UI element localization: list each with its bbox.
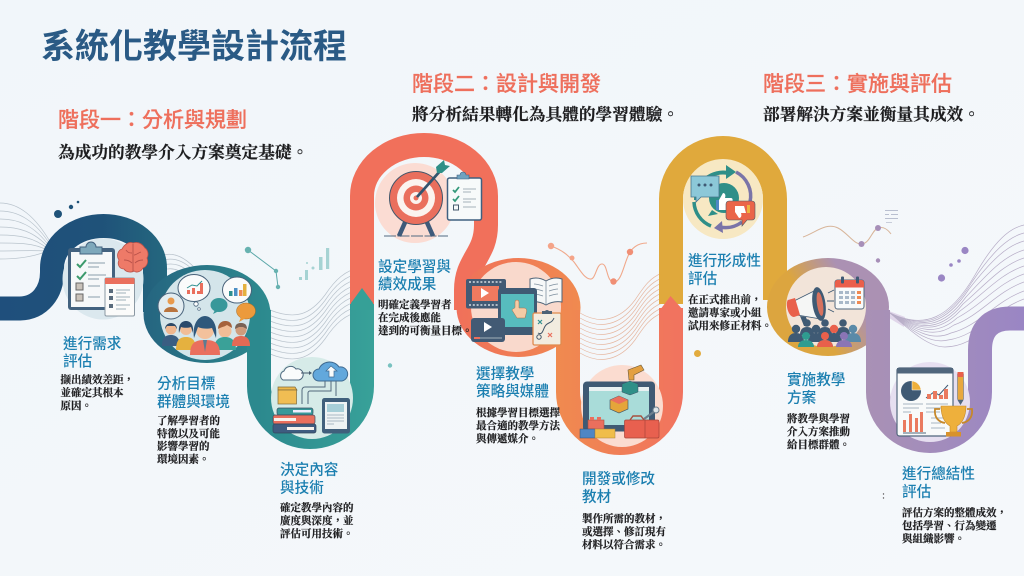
phase three summary: 部署解決方案並衡量其成效。 bbox=[763, 104, 980, 124]
decorative dots and mini charts bbox=[54, 201, 969, 499]
step 5 heading: 選擇教學 bbox=[476, 364, 534, 382]
phase one heading bbox=[58, 109, 308, 162]
step 7 description: 試用來修正材料。 bbox=[688, 319, 772, 332]
step 4 description: 明確定義學習者 bbox=[378, 298, 452, 311]
step 8 heading: 方案 bbox=[787, 388, 816, 406]
phase one title: 階段一：分析與規劃 bbox=[58, 109, 247, 132]
step 2 description: 了解學習者的 bbox=[157, 414, 220, 427]
icon: summative report and trophy bbox=[890, 362, 972, 442]
step 1 description: 撷出績效差距， bbox=[60, 373, 134, 386]
step 8 heading: 實施教學 bbox=[787, 370, 845, 388]
step 2 description: 特徵以及可能 bbox=[157, 427, 220, 440]
step 6 heading: 教材 bbox=[582, 488, 612, 506]
step 6 description: 製作所需的教材， bbox=[582, 512, 666, 525]
icon: needs assessment checklist and brain bbox=[62, 238, 148, 320]
step 3 description: 廣度與深度，並 bbox=[280, 514, 354, 527]
step 9 description: 包括學習、行為變遷 bbox=[902, 519, 997, 532]
step 8 description: 給目標群體。 bbox=[787, 438, 850, 451]
phase two title: 階段二：設計與開發 bbox=[412, 73, 601, 96]
step 5 description: 根據學習目標選擇 bbox=[476, 406, 560, 419]
step 7 text bbox=[688, 252, 772, 332]
step 3 heading: 與技術 bbox=[280, 478, 324, 496]
step 2 description: 環境因素。 bbox=[157, 452, 210, 465]
step 7 heading: 評估 bbox=[688, 270, 718, 288]
step 6 text bbox=[582, 470, 666, 551]
process ribbon bbox=[0, 145, 1024, 443]
step 3 description: 評估可用技術。 bbox=[280, 527, 354, 540]
step 5 description: 最合適的教學方法 bbox=[476, 419, 561, 432]
step 2 description: 影響學習的 bbox=[157, 440, 210, 453]
step 9 heading: 進行總結性 bbox=[902, 466, 975, 482]
step 9 description: 評估方案的整體成效， bbox=[902, 506, 1007, 519]
phase two heading bbox=[412, 73, 679, 124]
step 7 description: 邀請專家或小組 bbox=[688, 306, 762, 319]
step 8 text bbox=[787, 370, 850, 451]
step 1 heading: 進行需求 bbox=[63, 336, 122, 352]
step 9 heading: 評估 bbox=[902, 484, 932, 500]
step 1 description: 並確定其根本 bbox=[60, 386, 124, 399]
step 2 heading: 分析目標 bbox=[157, 376, 215, 392]
icon: implementation megaphone and audience bbox=[786, 267, 866, 347]
step 7 description: 在正式推出前， bbox=[688, 293, 762, 306]
step 6 description: 或選擇、修訂現有 bbox=[582, 525, 666, 538]
step 3 text bbox=[280, 460, 354, 540]
step 3 heading: 決定內容 bbox=[280, 460, 339, 478]
step 4 description: 達到的可衡量目標。 bbox=[378, 324, 472, 337]
step 5 description: 與傳遞媒介。 bbox=[476, 432, 539, 445]
step 4 heading: 設定學習與 bbox=[378, 258, 451, 276]
decorative waves bbox=[0, 203, 1024, 359]
step 1 text bbox=[60, 336, 134, 412]
phase three title: 階段三：實施與評估 bbox=[763, 73, 952, 96]
phase one summary: 為成功的教學介入方案奠定基礎。 bbox=[58, 142, 308, 162]
icon: target audience and context bbox=[158, 270, 256, 360]
step 9 description: 與組織影響。 bbox=[902, 532, 965, 545]
icon: strategies and media bbox=[466, 262, 562, 352]
title: 系統化教學設計流程 bbox=[41, 28, 347, 66]
step 3 description: 確定教學內容的 bbox=[280, 501, 354, 514]
step 4 text bbox=[378, 258, 472, 337]
icon: goals target and checklist bbox=[375, 160, 482, 243]
step 5 text bbox=[476, 364, 561, 445]
step 9 text bbox=[902, 466, 1007, 545]
step 4 heading: 績效成果 bbox=[378, 276, 437, 293]
icon: content and technology bbox=[271, 357, 353, 439]
step 6 description: 材料以符合需求。 bbox=[582, 538, 666, 551]
phase two summary: 將分析結果轉化為具體的學習體驗。 bbox=[412, 104, 679, 124]
step 8 description: 介入方案推動 bbox=[787, 425, 850, 438]
step 1 description: 原因。 bbox=[60, 399, 92, 412]
step 5 heading: 策略與媒體 bbox=[476, 382, 549, 400]
icon: formative feedback cycle bbox=[683, 159, 763, 239]
step 2 heading: 群體與環境 bbox=[157, 392, 230, 410]
step 6 heading: 開發或修改 bbox=[582, 470, 655, 488]
icon: develop materials bbox=[580, 365, 663, 447]
step 1 heading: 評估 bbox=[63, 353, 93, 370]
step 4 description: 在完成後應能 bbox=[378, 311, 441, 324]
step 2 text bbox=[157, 376, 230, 465]
step 7 heading: 進行形成性 bbox=[688, 252, 761, 270]
phase three heading bbox=[763, 73, 980, 124]
step 8 description: 將教學與學習 bbox=[787, 412, 850, 425]
